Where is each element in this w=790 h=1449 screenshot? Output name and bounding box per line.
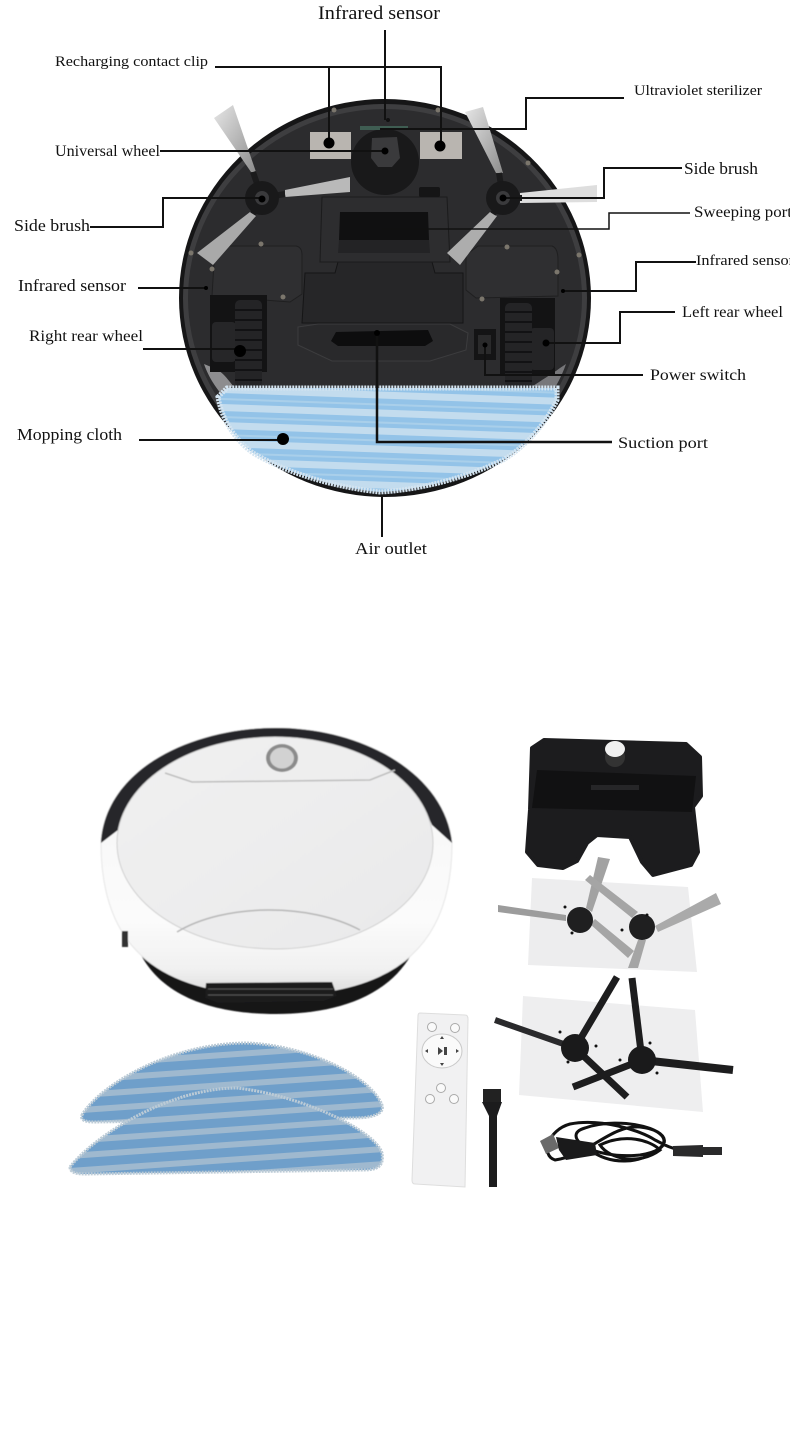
callout: side brush left: Side brush [14, 216, 91, 235]
callout: ultraviolet sterilizer: Ultraviolet sterilizer [634, 83, 762, 99]
callout: right rear wheel [29, 328, 246, 357]
dock knob [605, 741, 625, 767]
sweeping port lip [338, 240, 430, 253]
robot underside [179, 99, 597, 497]
robot top view [101, 728, 452, 1014]
side port [122, 931, 128, 947]
usb plug [540, 1134, 559, 1154]
mounting dots [564, 906, 648, 934]
callout: right rear wheel: Right rear wheel [29, 328, 144, 345]
callout: side brush right [500, 159, 759, 202]
callout: left rear wheel: Left rear wheel [682, 304, 783, 321]
callout: infrared sensor right [561, 253, 790, 293]
callout: side brush left [14, 196, 266, 235]
brush card upper [528, 878, 697, 972]
callout: sweeping port [382, 204, 790, 229]
callout: ultraviolet sterilizer [380, 83, 762, 129]
white body [101, 728, 452, 995]
callout: mopping cloth: Mopping cloth [17, 425, 123, 444]
callout: suction port: Suction port [618, 435, 709, 452]
black side brushes [495, 977, 733, 1097]
power switch [474, 329, 496, 360]
lower side shine left [204, 364, 233, 394]
rear vent [205, 982, 337, 1003]
callout: air outlet: Air outlet [355, 539, 427, 558]
remote control [412, 1013, 468, 1187]
small slot [419, 187, 440, 197]
universal wheel [371, 137, 400, 167]
left contact clip [310, 132, 351, 159]
power button [266, 744, 298, 772]
callout: universal wheel [55, 143, 388, 160]
right contact clip [420, 132, 462, 159]
underside plate [188, 109, 582, 487]
mounting dots [558, 1030, 658, 1074]
suction port [331, 330, 433, 346]
rim highlight [183, 104, 587, 492]
callout: sweeping port: Sweeping port [694, 204, 790, 221]
callout: power switch [482, 342, 746, 384]
right battery panel [466, 246, 558, 298]
callout: recharging contact clip: Recharging contact clip [55, 54, 208, 70]
universal wheel housing [351, 129, 419, 195]
lower lid seam [177, 910, 360, 932]
callout: infrared sensor right: Infrared sensor [696, 253, 790, 269]
callout: mopping cloth [17, 425, 289, 445]
robot shell [179, 99, 591, 497]
lid [117, 737, 433, 949]
callout: infrared sensor left: Infrared sensor [18, 276, 127, 295]
right side brush [447, 107, 597, 265]
usb grip [556, 1137, 597, 1160]
direction pad [422, 1034, 462, 1068]
dock contact slot [591, 785, 639, 790]
callout: suction port [374, 330, 709, 452]
callout: power switch: Power switch [650, 367, 746, 384]
remote buttons [426, 1022, 460, 1104]
cleaning brush [482, 1089, 502, 1187]
charging dock [527, 740, 701, 875]
left battery panel [212, 246, 302, 302]
back mopping pad [82, 1043, 382, 1122]
black bumper rim [101, 728, 452, 843]
callout: side brush right: Side brush [684, 159, 759, 178]
gray side brushes [498, 857, 721, 968]
ultraviolet sterilizer strip [360, 126, 408, 130]
screws [188, 108, 582, 302]
right rear wheel [212, 300, 262, 387]
sweeping port housing [320, 197, 450, 262]
brush card lower [519, 996, 703, 1112]
lower side shine right [533, 364, 566, 392]
front mopping pad [70, 1088, 382, 1174]
usb charging cable [540, 1122, 722, 1161]
dc plug [673, 1145, 722, 1157]
upper lid seam [165, 770, 395, 782]
dock recess [532, 770, 696, 812]
sweeping port opening [339, 212, 429, 240]
callout: recharging contact clip [55, 54, 446, 152]
callout: left rear wheel [542, 304, 783, 346]
dust box cover [302, 262, 463, 323]
left rear wheel well [500, 298, 555, 375]
callout: universal wheel: Universal wheel [55, 143, 160, 160]
callout: infrared sensor left [18, 276, 208, 295]
suction port bumper [298, 324, 468, 361]
right rear wheel well [210, 295, 267, 372]
callout: air outlet [355, 497, 427, 558]
callout: infrared sensor top [318, 3, 441, 122]
callout: infrared sensor top: Infrared sensor [318, 3, 441, 24]
left side brush [197, 105, 350, 265]
mopping cloth [218, 388, 557, 492]
base shadow [141, 955, 411, 1014]
left rear wheel [505, 303, 554, 387]
